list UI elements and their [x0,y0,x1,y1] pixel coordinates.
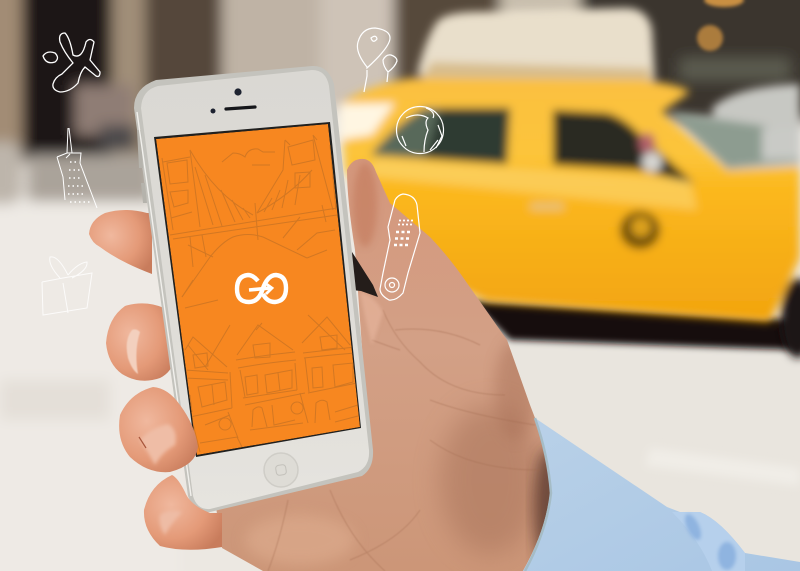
front camera [234,88,242,96]
shadow under taxi [470,300,800,350]
door panels highlights [365,160,697,210]
blue shirt sleeve [523,418,800,571]
dark gap between thumb and phone [352,252,378,297]
other car behind [712,84,800,170]
app screen [156,124,360,455]
side buttons [137,130,147,203]
phone [134,66,373,512]
proximity sensor [210,108,216,114]
doodle: gift box [42,257,92,315]
road [480,345,800,571]
doodle: splat shape [43,33,100,92]
ring and little fingers in front of phone [119,387,222,550]
front wheel [781,278,800,358]
line art: bridge [162,135,337,367]
phone body [134,66,373,512]
rear window [371,108,510,164]
door handle [530,203,564,210]
doodle: balloons [357,28,397,92]
taxi [340,8,800,358]
line art: row of houses [185,315,358,452]
taxi body [340,78,800,322]
hand: palm and thumb [215,159,562,571]
doodle: skyscraper [57,128,97,208]
app logo [237,275,286,302]
doodle: shoe sole [380,194,420,300]
fuel cap [620,211,660,249]
door window [553,110,695,184]
metal highlight along left edge [137,112,191,496]
earpiece [226,107,255,109]
roof sign [417,8,655,80]
doodle: globe [396,106,444,154]
screen bezel [154,122,361,457]
index and middle fingers behind phone [89,210,175,381]
home button [264,453,298,487]
